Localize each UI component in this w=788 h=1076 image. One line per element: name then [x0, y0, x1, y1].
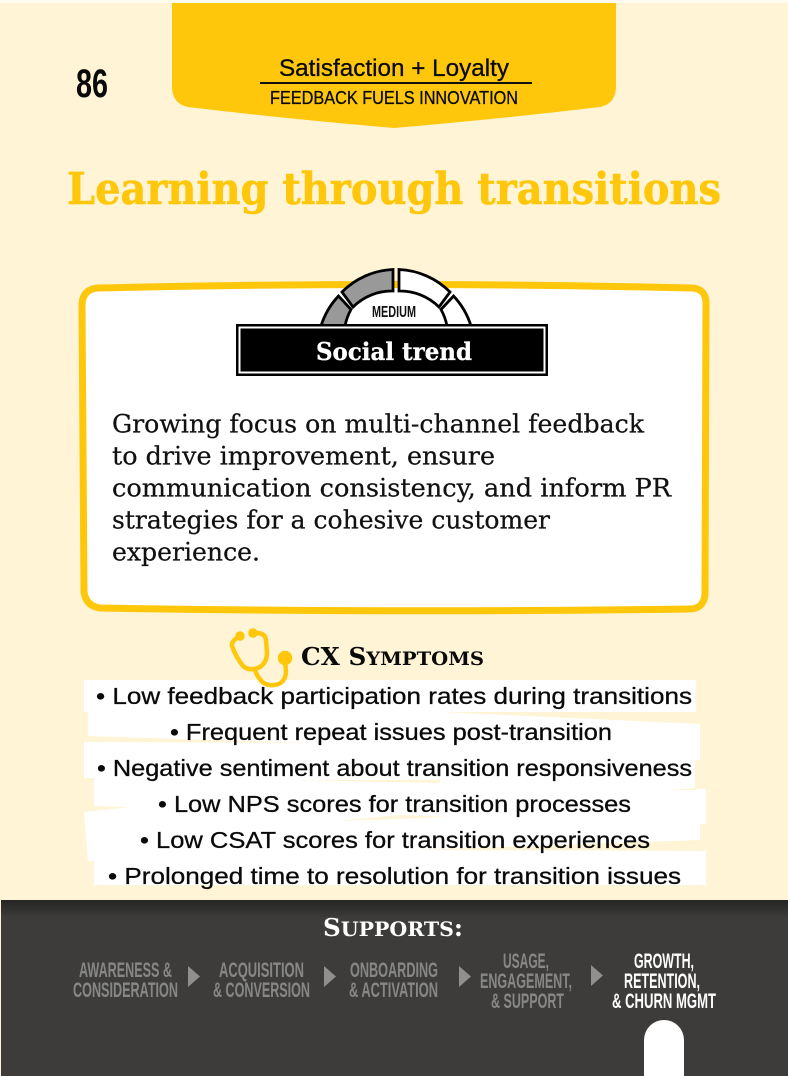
badge: social trend: Social trend	[316, 337, 472, 366]
arrow	[459, 966, 471, 987]
symptoms list: • Prolonged time to resolution for transition issues	[108, 863, 681, 889]
icon: stethoscope	[232, 630, 290, 685]
arrow	[324, 966, 336, 987]
stage: awareness: AWARENESS &	[79, 959, 172, 982]
card body text	[112, 410, 672, 566]
stage: acquisition	[213, 959, 310, 1002]
symptoms list: • Frequent repeat issues post-transition	[170, 719, 612, 745]
header subtitle: FEEDBACK FUELS INNOVATION	[270, 88, 518, 108]
stage: onboarding	[349, 959, 438, 1002]
stage: onboarding: ONBOARDING	[350, 959, 438, 982]
white paint strips behind symptoms	[84, 680, 706, 885]
stage: acquisition: & CONVERSION	[213, 979, 310, 1002]
stage: usage: USAGE,	[503, 950, 549, 973]
stage: awareness: CONSIDERATION	[73, 979, 178, 1002]
card body text: Growing focus on multi-channel feedback	[112, 410, 645, 438]
symptoms heading: CX SYMPTOMS	[301, 642, 484, 671]
supports heading: SUPPORTS:	[323, 913, 463, 942]
stage: growth (active): & CHURN MGMT	[612, 990, 716, 1013]
stage: onboarding: & ACTIVATION	[349, 979, 438, 1002]
stage: acquisition: ACQUISITION	[219, 959, 304, 982]
footer panel	[1, 900, 788, 1076]
badge: social trend	[236, 324, 548, 376]
stage: usage: ENGAGEMENT,	[480, 970, 572, 993]
gauge: medium	[321, 270, 471, 326]
stage: growth (active): GROWTH,	[634, 950, 694, 973]
gauge: medium: MEDIUM	[372, 304, 416, 321]
stage: usage: & SUPPORT	[491, 990, 564, 1013]
arrow	[188, 966, 200, 987]
header banner	[172, 3, 616, 128]
stage: awareness	[73, 959, 178, 1002]
stage: usage	[480, 950, 572, 1013]
card body text: strategies for a cohesive customer	[112, 506, 550, 534]
symptoms list	[96, 683, 692, 889]
symptoms list: • Negative sentiment about transition responsiveness	[97, 755, 692, 781]
card body text: experience.	[112, 538, 260, 566]
card body text: communication consistency, and inform PR	[112, 474, 672, 502]
header category: Satisfaction + Loyalty	[279, 55, 509, 82]
stage: growth (active)	[612, 950, 716, 1013]
page number: 86	[76, 62, 108, 106]
arrow	[591, 965, 603, 986]
stage: growth (active): RETENTION,	[624, 970, 700, 993]
symptoms list: • Low feedback participation rates during transitions	[96, 683, 692, 709]
panel: social trend card	[82, 270, 706, 611]
title: Learning through transitions	[67, 164, 721, 215]
active stage marker	[644, 1020, 684, 1076]
symptoms list: • Low NPS scores for transition processes	[158, 791, 631, 817]
card body text: to drive improvement, ensure	[112, 442, 495, 470]
symptoms list: • Low CSAT scores for transition experiences	[140, 827, 650, 853]
